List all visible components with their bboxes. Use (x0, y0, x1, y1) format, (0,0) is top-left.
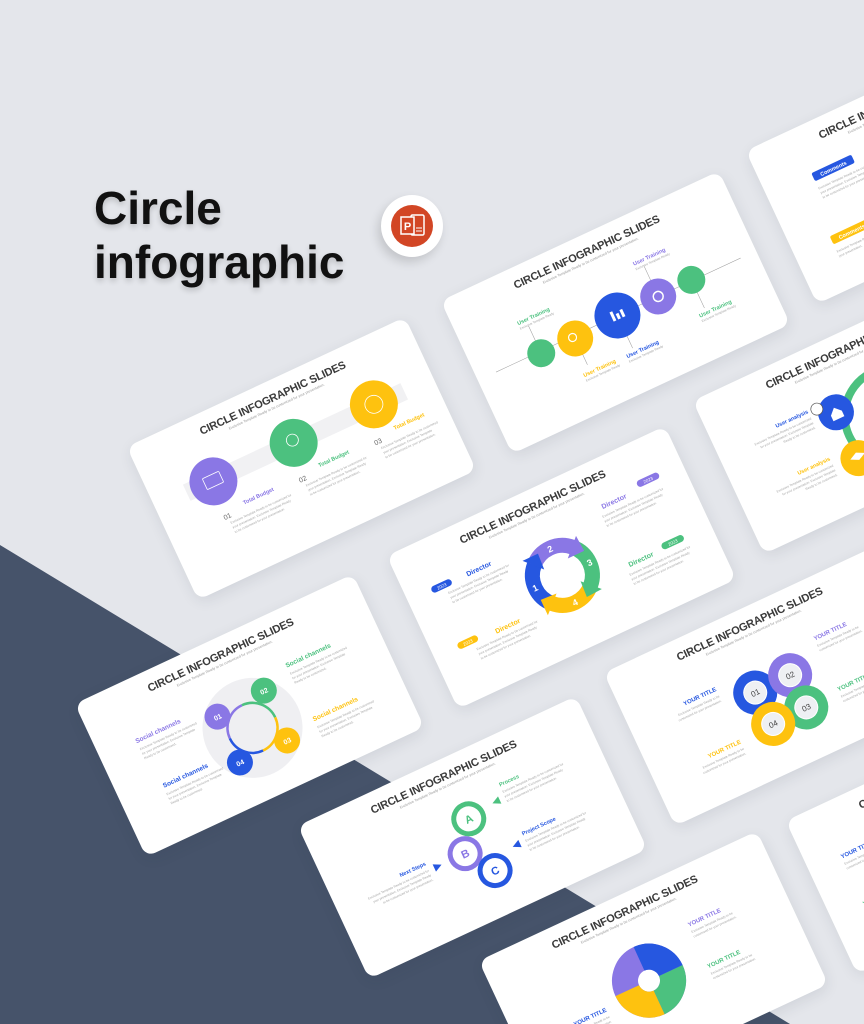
slide I: pie: customized for your presentation. (712, 956, 756, 980)
slide A: timeline circles: CIRCLE INFOGRAPHIC SLIDES (197, 359, 347, 437)
slide B: user training: Exclusive Template Ready to be customized for your presentation. (542, 236, 639, 284)
slide G: four rings: 01 (749, 686, 761, 699)
slide E: cycle arrows: Director (494, 617, 521, 635)
slide F: social channels: Exclusive Template Ready to be customized for your presentation. (176, 639, 273, 687)
slide A: timeline circles: your presentation. Exclusive Template Ready (307, 461, 366, 492)
slide A: timeline circles: Exclusive Template Ready to be customized for your presentation. (228, 382, 325, 430)
slide B: user training: Exclusive Template Ready (700, 303, 736, 323)
slide B: user training: User Training (632, 247, 666, 267)
slide I: pie: YOUR TITLE (706, 949, 741, 970)
slide D: user analysis (partial): for your presentation. Exclusive Template (781, 468, 836, 496)
slide F: social channels: Exclusive Template Ready to be customized (165, 766, 224, 796)
slide E: cycle arrows: 2023 (667, 537, 678, 546)
slide B: user training: Exclusive Template Ready (585, 363, 621, 382)
slide E: cycle arrows: your presentation. Exclusive Template Ready (603, 492, 663, 523)
slide A: timeline circles: Total Budget (317, 449, 350, 469)
slide G: four rings: customized for your presentation. (702, 751, 746, 774)
slide A: timeline circles: your presentation. Exclusive Template Ready (231, 498, 291, 529)
slide E: cycle arrows: your presentation. Exclusive Template Ready (477, 625, 537, 655)
slide H: ABC process: your presentation. Exclusive Template Ready (526, 816, 586, 847)
slide A: timeline circles: Total Budget (392, 412, 425, 431)
slide E: cycle arrows: 2023 (462, 637, 474, 646)
slide F: social channels: Social channels (284, 642, 332, 669)
slide G: four rings (603, 543, 864, 825)
slide H: ABC process: Next Steps (398, 861, 427, 878)
slide I: pie (478, 831, 828, 1024)
slide D: user analysis (partial): for your presentation. Exclusive Template (759, 420, 814, 449)
slide A: timeline circles: Exclusive Template Ready to be customized for (305, 455, 368, 487)
slide B: user training: Exclusive Template Ready (519, 311, 555, 330)
slide F: social channels: for your presentation. Exclusive Template (141, 727, 196, 755)
slide D: user analysis (partial): User analysis (774, 409, 809, 429)
slide E: cycle arrows: to be customized for your presentation. (480, 633, 531, 660)
slide H: ABC process: to be customized for your presentation. (528, 824, 580, 851)
slide A: timeline circles: Exclusive Template Ready to be customized (380, 420, 438, 450)
slide D: user analysis (partial): Exclusive Template Ready to be customized (753, 416, 812, 446)
slide E: cycle arrows: Exclusive Template Ready to be customized for (447, 562, 510, 595)
slide F: social channels: Ready to be customized. (143, 741, 177, 760)
slide A: timeline circles: Total Budget (242, 486, 275, 506)
slide F: social channels: 02 (259, 687, 269, 696)
slide B: user training: User Training (516, 306, 551, 327)
slide H: ABC process: Project Scope (521, 816, 556, 837)
slide F: social channels: 03 (282, 736, 292, 746)
slide E: cycle arrows: your presentation. Exclusive Template Ready (449, 568, 509, 599)
slide E: cycle arrows: CIRCLE INFOGRAPHIC SLIDES (457, 468, 607, 546)
slide A: timeline circles: 02 (298, 474, 308, 484)
slide A: timeline circles: to be customized for your presentation. (309, 469, 361, 496)
slide D: user analysis (partial): User analysis (796, 456, 831, 476)
main title: Circle (94, 182, 222, 234)
slide E: cycle arrows (386, 426, 736, 708)
slide H: ABC process: Process (498, 773, 520, 788)
slide C: comments (partial): your presentation. (838, 243, 863, 258)
slide A: timeline circles: to be customized for your presentation. (384, 432, 436, 459)
slide F: social channels: for your presentation. Exclusive Template (167, 772, 222, 800)
slide H: ABC process: to be customized for your presentation. (382, 877, 434, 904)
slide E: cycle arrows: 1 (530, 582, 539, 593)
icon: powerpoint (381, 195, 443, 257)
slide I: pie: customized for your presentation. (692, 914, 737, 938)
slide E: cycle arrows: Exclusive Template Ready to be customized for (601, 486, 664, 518)
slide H: ABC process: your presentation. Exclusive Template Ready (503, 767, 563, 798)
slide F: social channels: Social channels (134, 717, 182, 745)
slide H: ABC process: Exclusive Template Ready to be customized for (367, 868, 430, 900)
slide E: cycle arrows: your presentation. Exclusive Template Ready (630, 550, 690, 581)
slide G: four rings: CIRCLE INFOGRAPHIC SLIDES (674, 585, 824, 663)
slide E: cycle arrows: to be customized for your presentation. (632, 558, 684, 585)
main title (94, 182, 344, 292)
slide G: four rings: YOUR TITLE (813, 621, 847, 642)
slide A: timeline circles: to be customized for your presentation. (233, 506, 285, 533)
slide F: social channels: for your presentation. Exclusive Template (318, 705, 373, 733)
slide E: cycle arrows: to be customized for your presentation. (451, 577, 503, 604)
slide B: user training: Exclusive Template Ready (634, 251, 670, 271)
slide G: four rings: Exclusive Template Ready to be customized for your presentation. (705, 608, 802, 656)
slide E: cycle arrows: Exclusive Template Ready to be customized for (475, 619, 539, 651)
slide I: pie: CIRCLE INFOGRAPHIC SLIDES (549, 873, 699, 951)
slide E: cycle arrows: 3 (585, 557, 593, 568)
slide E: cycle arrows: Exclusive Template Ready to be customized for your presentation. (488, 491, 585, 539)
slide F: social channels: Ready to be customized. (169, 786, 203, 805)
slide G: four rings: Exclusive Template Ready to be (816, 624, 859, 647)
slide B: user training: CIRCLE INFOGRAPHIC SLIDES (511, 213, 661, 291)
slide A: timeline circles: 03 (373, 437, 383, 447)
slide F: social channels: Ready to be customized. (293, 666, 327, 684)
slide G: four rings: 03 (800, 701, 812, 713)
slide F: social channels: for your presentation. Exclusive Template (291, 651, 346, 680)
slide F: social channels: Exclusive Template Ready to be customized (139, 721, 197, 751)
slide F: social channels: Social channels (161, 762, 209, 789)
slide G: four rings: YOUR TITLE (707, 739, 742, 760)
slide E: cycle arrows: 4 (570, 596, 579, 608)
slide I: pie: YOUR TITLE (687, 908, 722, 928)
slide C: comments (partial): Comments (819, 160, 847, 178)
slide I: pie: Exclusive Template Ready to be (690, 911, 733, 933)
slide J: partial bottom-right (785, 691, 864, 973)
slide E: cycle arrows: Director (600, 493, 628, 510)
slide A: timeline circles: Exclusive Template Ready to be customized for (229, 492, 292, 524)
slide F: social channels: CIRCLE INFOGRAPHIC SLIDES (145, 616, 295, 694)
slide A: timeline circles: 01 (222, 512, 232, 521)
slide G: four rings: Exclusive Template Ready to be (701, 746, 744, 769)
slide B: user training: User Training (625, 339, 660, 360)
slide G: four rings: customized for your presentation. (677, 698, 722, 722)
slide E: cycle arrows: 2023 (642, 475, 654, 484)
slide A: timeline circles: your presentation. Exclusive Template (382, 428, 432, 454)
slide H: ABC process (297, 696, 647, 978)
slide B: user training (440, 171, 790, 453)
slide E: cycle arrows: 2023 (436, 581, 447, 590)
slide H: ABC process: your presentation. Exclusive Template Ready (372, 873, 432, 903)
slide B: user training: User Training (698, 299, 732, 319)
slide C: comments (partial) (745, 21, 864, 303)
slide E: cycle arrows: Director (465, 560, 493, 578)
slide B: user training: User Training (582, 358, 617, 379)
slide F: social channels: Ready to be customized. (320, 719, 354, 738)
slide G: four rings: customized for your presentation. (818, 628, 863, 652)
slide H: ABC process: Exclusive Template Ready to be customized for (524, 810, 587, 842)
slide F: social channels: 04 (235, 758, 245, 768)
slide H: ABC process: Exclusive Template Ready to be customized for (501, 761, 564, 793)
slide H: ABC process: to be customized for your presentation. (505, 775, 557, 802)
main title: infographic (94, 236, 344, 288)
slide G: four rings: Exclusive Template Ready to be (677, 694, 720, 717)
slide F: social channels: Exclusive Template Ready to be customized (289, 645, 347, 675)
slide G: four rings: YOUR TITLE (682, 687, 717, 707)
slide H: ABC process: C (489, 864, 501, 878)
slide A: timeline circles (126, 317, 476, 599)
slide H: ABC process: B (459, 847, 471, 861)
slide G: four rings: 04 (767, 718, 779, 730)
slide D: user analysis (partial): Ready to be customized. (782, 425, 816, 444)
slide F: social channels: Social channels (311, 695, 359, 723)
slide B: user training: Exclusive Template Ready (628, 344, 664, 363)
slide H: ABC process: A (463, 812, 475, 826)
slide D: user analysis (partial): Ready to be customized. (804, 472, 838, 491)
slide F: social channels: 01 (213, 713, 223, 722)
slide F: social channels: Exclusive Template Ready to be customized (316, 699, 374, 729)
slide I: pie: Exclusive Template Ready to be (710, 952, 753, 975)
slide E: cycle arrows: Director (627, 551, 655, 568)
slide H: ABC process: Exclusive Template Ready to be customized for your presentation. (399, 761, 496, 809)
slide D: user analysis (partial): Exclusive Template Ready to be customized (775, 463, 834, 493)
slide E: cycle arrows: 2 (545, 543, 554, 554)
slide I: pie: Exclusive Template Ready to be customized for your presentation. (580, 896, 677, 944)
slide E: cycle arrows: Exclusive Template Ready to be customized for (628, 544, 691, 576)
icon: powerpoint: P (404, 221, 411, 233)
slide G: four rings: 02 (784, 669, 796, 681)
slide H: ABC process: CIRCLE INFOGRAPHIC SLIDES (368, 738, 518, 816)
slide D: user analysis (partial) (692, 271, 864, 553)
slide E: cycle arrows: to be customized for your presentation. (605, 500, 657, 527)
slide F: social channels (74, 574, 424, 856)
